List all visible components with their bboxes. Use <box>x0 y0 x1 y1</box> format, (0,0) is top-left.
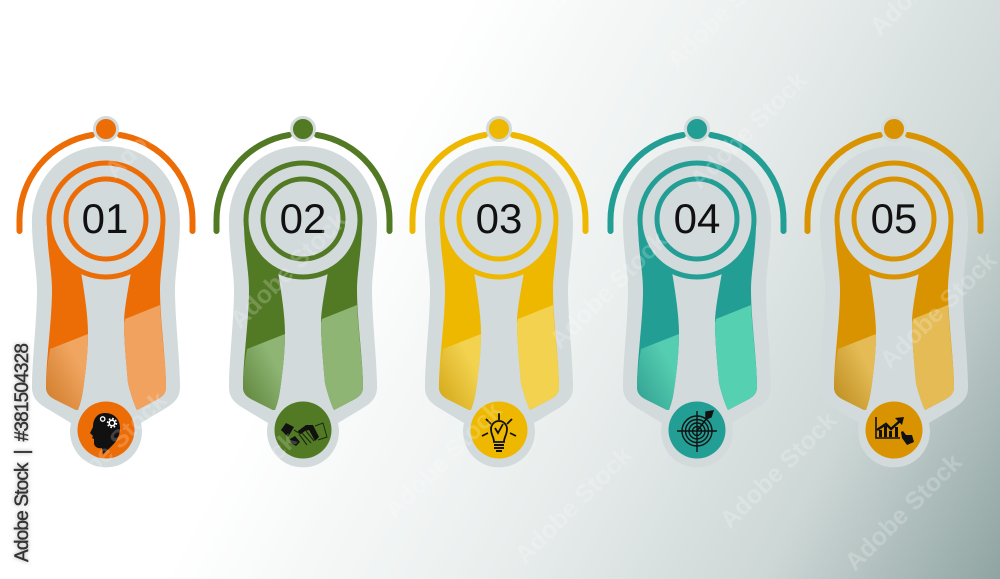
watermark text: Adobe Stock <box>369 56 497 184</box>
inner ring <box>657 179 737 259</box>
unit 02: green <box>216 118 390 467</box>
number: 01 <box>82 195 128 242</box>
number: 04 <box>674 195 720 242</box>
top arc <box>610 135 784 231</box>
watermark text: Adobe Stock <box>509 441 637 569</box>
outer ring <box>442 163 556 277</box>
left panel <box>439 200 499 410</box>
icon: light bulb with check <box>482 413 516 451</box>
left light overlay <box>439 334 481 410</box>
left light overlay <box>243 334 285 410</box>
right light overlay <box>124 305 166 410</box>
left light overlay <box>834 334 876 410</box>
right panel <box>894 200 954 410</box>
gray body <box>229 146 377 467</box>
gray body <box>425 146 573 467</box>
inner ring <box>459 179 539 259</box>
top dot <box>488 118 510 140</box>
left panel <box>834 200 894 410</box>
watermark text: Adobe Stock <box>99 56 227 184</box>
unit 05: amber <box>807 118 981 467</box>
icon: growth chart with hand <box>876 417 914 445</box>
left panel <box>637 200 697 410</box>
icon badge <box>668 402 726 458</box>
top dot <box>882 118 906 140</box>
watermark text: Adobe Stock <box>174 426 302 554</box>
right panel <box>106 200 166 410</box>
inner ring <box>66 179 146 259</box>
gray body <box>623 146 771 467</box>
icon badge <box>274 402 332 458</box>
watermark text: Adobe Stock <box>379 396 507 524</box>
outer ring <box>49 163 163 277</box>
number: 03 <box>476 195 522 242</box>
outer ring <box>837 163 951 277</box>
top arc <box>807 135 981 231</box>
number: 02 <box>280 195 326 242</box>
left light overlay <box>637 334 679 410</box>
watermark text: Adobe Stock <box>874 246 1000 374</box>
left panel <box>243 200 303 410</box>
inner ring <box>854 179 934 259</box>
icon: target with dart <box>677 411 717 452</box>
inner ring <box>263 179 343 259</box>
icon badge <box>78 402 134 458</box>
icon badge <box>470 402 528 458</box>
right panel <box>303 200 363 410</box>
icon: handshake <box>281 423 327 446</box>
right light overlay <box>321 305 363 410</box>
unit 03: yellow <box>412 118 586 467</box>
gray body <box>820 146 968 467</box>
right light overlay <box>715 305 757 410</box>
right light overlay <box>517 305 559 410</box>
left panel <box>46 200 106 410</box>
unit 01: orange <box>19 118 193 467</box>
top dot <box>292 118 314 140</box>
unit 04: teal <box>610 118 784 467</box>
top dot <box>686 118 708 140</box>
icon badge <box>866 402 922 458</box>
outer ring <box>246 163 360 277</box>
watermark text: Adobe Stock <box>714 406 842 534</box>
watermark text: Adobe Stock <box>544 226 672 354</box>
watermark text: Adobe Stock <box>44 386 172 514</box>
watermark text: Adobe Stock <box>684 66 812 194</box>
left light overlay <box>46 334 88 410</box>
top arc <box>412 135 586 231</box>
number: 05 <box>871 195 917 242</box>
top dot <box>94 118 118 140</box>
icon: head with gears <box>90 413 120 454</box>
right panel <box>697 200 757 410</box>
stock id caption: Adobe Stock | #381504328 <box>12 343 33 562</box>
watermark text: Adobe Stock <box>839 448 967 576</box>
top arc <box>19 135 193 231</box>
right panel <box>499 200 559 410</box>
top arc <box>216 135 390 231</box>
outer ring <box>640 163 754 277</box>
right light overlay <box>912 305 954 410</box>
watermark text: Adobe Stock <box>224 206 352 334</box>
gray body <box>32 146 180 467</box>
